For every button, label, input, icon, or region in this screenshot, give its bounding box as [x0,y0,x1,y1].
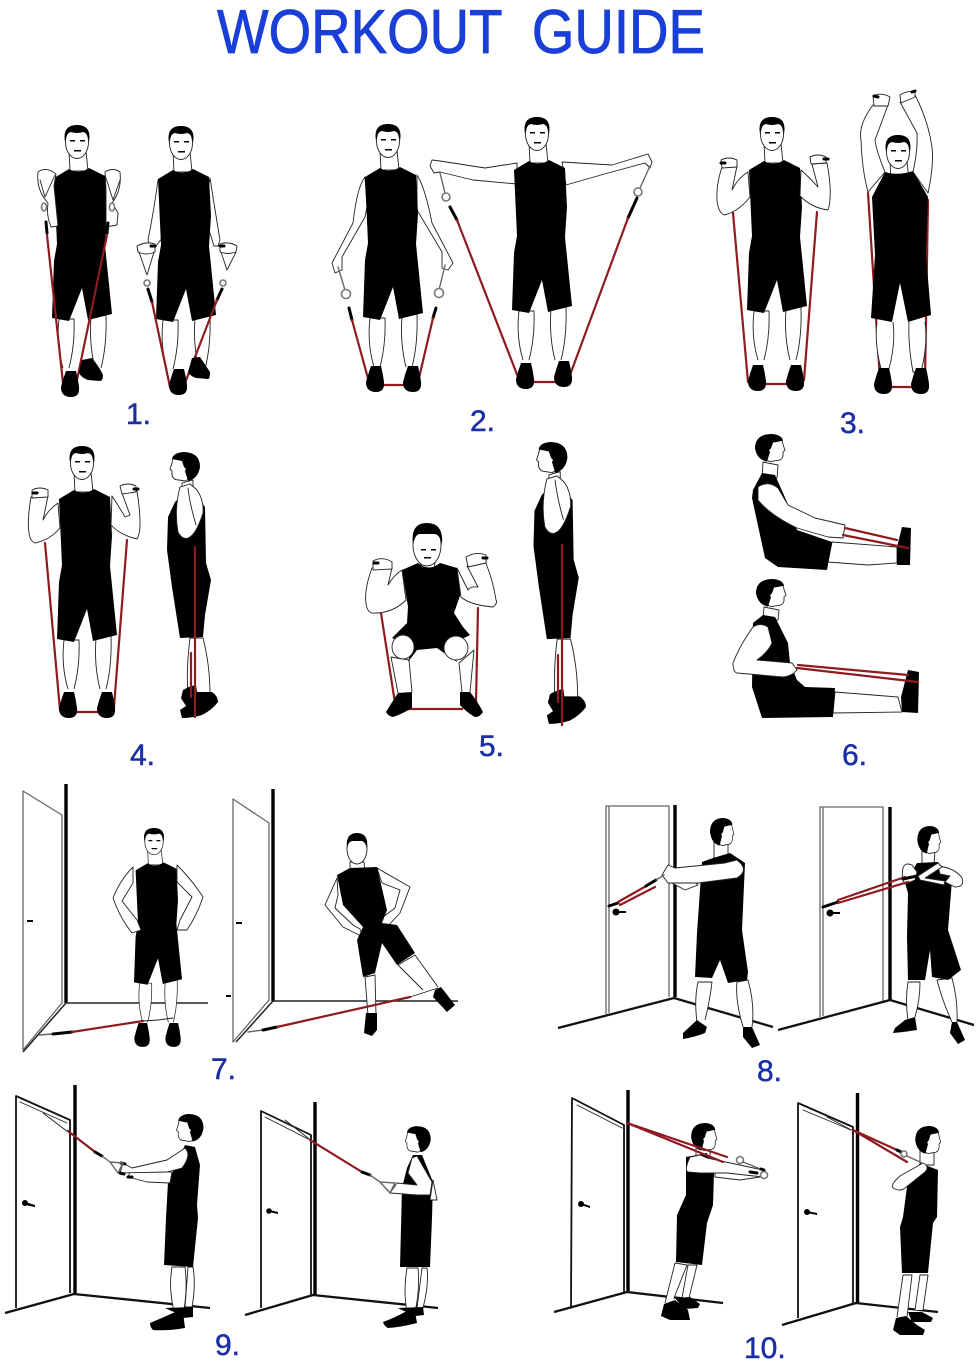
door and wall 7a [23,784,208,1052]
number 5: 5. [479,730,504,763]
figure 2a [332,124,453,392]
figure 6a [752,434,911,570]
door and wall 9b [245,1102,438,1315]
figure 3b [860,91,932,394]
figure 3a [717,117,830,391]
exercise 8 [558,805,974,1088]
figure 10b [827,1117,941,1335]
figure 2b [430,117,652,389]
number 3: 3. [840,407,865,440]
figure 8a [609,818,760,1048]
door and wall 8a [558,805,773,1028]
exercise 2 [332,117,652,438]
number 8: 8. [757,1055,782,1088]
door and wall 9a [5,1085,210,1313]
number 9: 9. [215,1329,240,1362]
exercise 3 [717,91,932,440]
exercise 10 [554,1090,941,1364]
figure 7a [39,828,203,1047]
exercise 6 [733,434,919,772]
figure 4b [167,452,218,718]
exercise 7 [23,784,458,1086]
figure 10a [627,1123,768,1320]
figure 5a [366,523,497,717]
number 4: 4. [130,739,155,772]
number 1: 1. [126,398,151,431]
figure 6b [733,579,919,718]
figure 1a [38,125,120,397]
door and wall 7b [226,789,458,1042]
number 6: 6. [842,739,867,772]
number 7: 7. [211,1053,236,1086]
figure 8b [823,826,965,1044]
number 2: 2. [470,405,495,438]
title: WORKOUT GUIDE [217,0,705,67]
exercise 4 [28,446,218,772]
door and wall 8b [778,807,974,1030]
figure 7b [248,833,455,1036]
exercise 1 [38,125,237,431]
door and wall 10a [554,1090,723,1312]
exercise 9 [5,1085,438,1362]
figure 9b [285,1120,437,1328]
door and wall 10b [782,1093,938,1325]
exercise 5 [366,442,586,763]
figure 5b [533,442,586,725]
figure 9a [43,1113,204,1330]
figure 4a [28,446,140,718]
figure 1b [137,126,237,395]
